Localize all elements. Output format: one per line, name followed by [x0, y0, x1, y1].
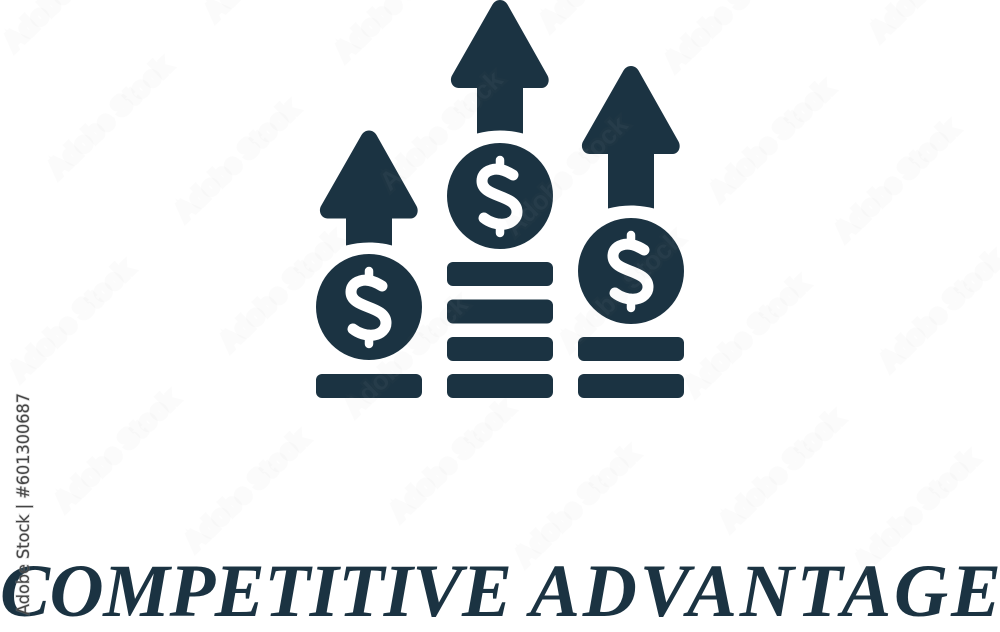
- icon: middle up arrow: [451, 0, 549, 134]
- bar: right coin 1: [578, 337, 684, 361]
- watermarks: Adobe Stock: [48, 384, 184, 516]
- watermarks: Adobe Stock: [713, 404, 849, 536]
- icon: left up arrow: [320, 130, 418, 246]
- watermarks: Adobe Stock: [498, 109, 634, 241]
- icon: middle dollar coin: [447, 143, 553, 249]
- icon: right up arrow: [582, 66, 680, 208]
- stock id side label: Adobe Stock | #601300687: [14, 393, 33, 615]
- watermarks: Adobe Stock: [3, 254, 139, 386]
- watermarks: Adobe Stock: [338, 289, 474, 421]
- bar: middle coin 1: [447, 262, 553, 286]
- bar: left coin 1: [316, 374, 422, 398]
- watermarks: Adobe Stock: [828, 114, 964, 246]
- watermarks: Adobe Stock: [373, 64, 509, 196]
- watermarks: Adobe Stock: [553, 224, 689, 356]
- watermarks: Adobe Stock: [678, 269, 814, 401]
- watermarks: Adobe Stock: [41, 51, 177, 183]
- bar: middle coin 4: [447, 374, 553, 398]
- middle column: arrow, coin and four bars: [447, 0, 553, 398]
- watermarks: Adobe Stock: [168, 94, 304, 226]
- bar: middle coin 3: [447, 337, 553, 361]
- title: COMPETITIVE: [0, 550, 512, 632]
- bar: right coin 2: [578, 374, 684, 398]
- watermarks: Adobe Stock: [178, 424, 314, 556]
- title: [0, 550, 1000, 632]
- title: ADVANTAGE: [526, 550, 1000, 632]
- left column: arrow, coin and one bar: [316, 130, 422, 398]
- bar: middle coin 2: [447, 300, 553, 324]
- icon: left dollar coin: [316, 254, 422, 360]
- right column: arrow, coin and two bars: [578, 66, 684, 398]
- watermarks: Adobe Stock: [383, 394, 519, 526]
- icon: right dollar coin: [578, 218, 684, 324]
- watermarks: Adobe Stock: [703, 74, 839, 206]
- watermarks: Adobe Stock: [213, 224, 349, 356]
- icon: rising coin stacks with arrows: [316, 0, 684, 398]
- watermarks: Adobe Stock: [848, 444, 984, 576]
- watermarks: Adobe Stock: [508, 439, 644, 571]
